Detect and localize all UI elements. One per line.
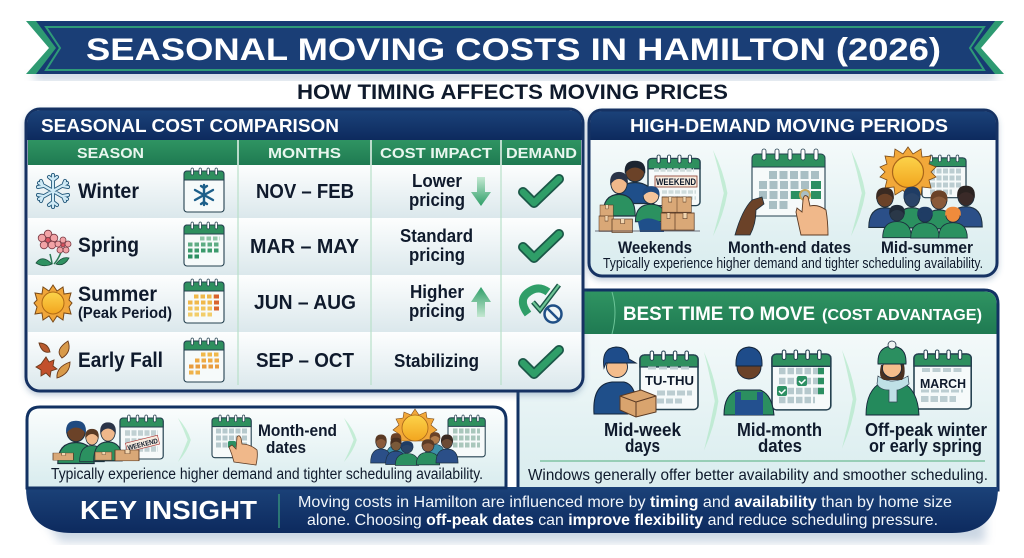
icon: spring calendar [184, 222, 224, 266]
demand check [523, 350, 559, 374]
icon: winter calendar [184, 168, 224, 212]
cost: lower pricing: pricing [409, 190, 465, 210]
demand check [523, 179, 559, 203]
arrow [713, 150, 727, 236]
illustration: winter person and March calendar [866, 341, 971, 415]
cost: stabilizing: Stabilizing [394, 351, 479, 371]
comparison heading [28, 110, 582, 140]
icon: snowflake [38, 175, 68, 207]
row: spring: Spring [78, 234, 139, 257]
arrow [704, 352, 718, 451]
illustration: movers with weekend calendar: WEEKEND [127, 438, 159, 452]
arrow [344, 418, 357, 462]
label: month-end dates: Month-end dates [728, 238, 851, 257]
high-demand heading [590, 112, 996, 140]
key insight text: Moving costs in Hamilton are influenced more by timing and availability than by home size [298, 494, 952, 511]
label: month-end dates: dates [266, 438, 306, 457]
illustration: winter person and March calendar: MARCH [920, 377, 966, 391]
panel: seasonal cost comparison [26, 109, 583, 391]
high-demand heading: HIGH-DEMAND MOVING PERIODS [630, 115, 948, 136]
icon: autumn leaves [36, 341, 70, 378]
row: summer: (Peak Period) [78, 305, 172, 322]
illustration: mid-week mover with box and calendar [594, 347, 698, 417]
panel: best time to move: or early spring [869, 436, 982, 456]
panel: best time to move [518, 290, 998, 490]
icon: spring flowers [36, 230, 71, 266]
arrow [851, 150, 865, 236]
demand: check with prohibition sign [523, 285, 562, 322]
icon: summer sun [34, 285, 72, 322]
label: mid-week days: Mid-week [604, 420, 682, 440]
label: month-end dates: Month-end [258, 421, 337, 440]
table header [28, 140, 581, 165]
best time note: Windows generally offer better availability and smoother scheduling. [528, 467, 988, 484]
label: off-peak winter or early spring: Off-peak winter [865, 420, 987, 440]
panel: lower-left summary [27, 407, 506, 488]
row: winter: Winter [78, 180, 139, 203]
illustration: family with boxes and weekend calendar [595, 155, 700, 232]
title text: SEASONAL MOVING COSTS IN HAMILTON (2026) [86, 31, 941, 67]
illustration: movers with weekend calendar [53, 415, 163, 464]
cost: higher pricing [409, 282, 491, 321]
row: summer: Summer [78, 283, 157, 306]
illustration: crowd with sun and calendar [869, 147, 982, 238]
row: summer [34, 279, 562, 323]
label: month-end dates [258, 421, 337, 457]
cost: higher pricing: Higher [410, 282, 464, 302]
row: winter [38, 168, 559, 212]
illustration: hand on calendar [212, 415, 257, 465]
row: spring: MAR – MAY [250, 236, 360, 258]
key insight label: KEY INSIGHT [80, 495, 257, 525]
panel: best time to move: dates [758, 436, 802, 456]
table header: COST IMPACT [380, 145, 492, 162]
icon: summer calendar [184, 279, 224, 323]
panel: high-demand moving periods [589, 110, 997, 276]
subtitle: HOW TIMING AFFECTS MOVING PRICES [297, 80, 728, 104]
table header: SEASON [77, 145, 144, 162]
row: spring [36, 222, 559, 266]
key insight text: alone. Choosing off-peak dates can improve flexibility and reduce scheduling pressure. [307, 512, 938, 529]
cost: standard pricing: pricing [409, 245, 465, 265]
demand check [523, 234, 559, 258]
cost: lower pricing: Lower [412, 171, 462, 191]
table header: DEMAND [506, 145, 577, 162]
illustration: crowd with sun and calendar [371, 409, 485, 465]
label: weekends: Weekends [618, 238, 692, 257]
illustration: family with boxes and weekend calendar: WEEKEND [656, 177, 696, 187]
label: mid-month dates: Mid-month [737, 420, 822, 440]
panel: key insight band [26, 487, 998, 542]
cost: higher pricing: pricing [409, 301, 465, 321]
row: summer: JUN – AUG [254, 292, 356, 314]
best time header: BEST TIME TO MOVE [623, 303, 815, 325]
illustration: hand selecting month-end date [735, 149, 828, 235]
illustration: mid-month worker and calendar [724, 347, 831, 415]
row: early fall: SEP – OCT [256, 350, 354, 372]
key insight text [298, 494, 952, 529]
cost: lower pricing [409, 171, 491, 210]
row: winter: NOV – FEB [256, 181, 354, 203]
cost: standard pricing [400, 226, 473, 265]
icon: fall calendar [184, 338, 224, 382]
lower-left note: Typically experience higher demand and tighter scheduling availability. [51, 466, 483, 483]
title banner [26, 21, 1004, 80]
label: mid-summer: Mid-summer [881, 238, 973, 257]
cost: standard pricing: Standard [400, 226, 473, 246]
best time header: (COST ADVANTAGE) [822, 307, 982, 324]
panel: best time to move: days [625, 436, 660, 456]
best time header [584, 292, 996, 334]
row: early fall [36, 338, 559, 382]
arrow [178, 418, 191, 462]
table header: MONTHS [268, 145, 341, 162]
arrow [842, 350, 856, 449]
comparison heading: SEASONAL COST COMPARISON [41, 115, 339, 136]
illustration: mid-week mover with box and calendar: TU-THU [645, 373, 694, 388]
row: early fall: Early Fall [78, 349, 163, 372]
